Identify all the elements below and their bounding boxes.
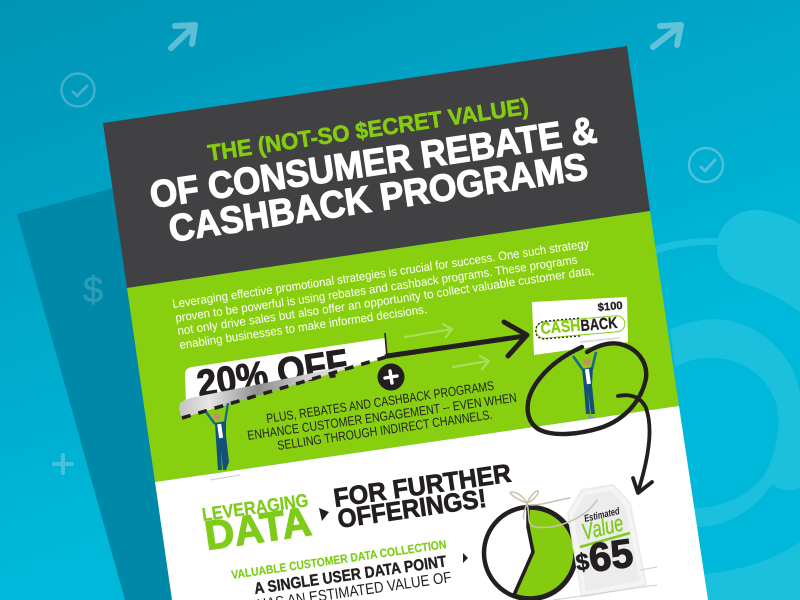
coupon: 20% off: 20% OFF: [194, 342, 351, 406]
icon: check left: [62, 74, 94, 106]
tag: amount: 65: [586, 531, 636, 581]
subhead: VALUABLE CUSTOMER DATA COLLECTION: [230, 537, 447, 582]
light arrows: [405, 324, 489, 369]
card pill: [535, 315, 626, 339]
heading: leveraging: LEVERAGING: [201, 489, 310, 525]
stat line one: A SINGLE USER DATA POINT: [253, 553, 448, 598]
intro paragraph: proven to be powerful is using rebates and cashback programs. These programs: [174, 253, 578, 325]
caption: [246, 378, 518, 453]
caption: PLUS, REBATES AND CASHBACK PROGRAMS: [265, 378, 495, 426]
tag string: [510, 491, 597, 528]
tag underline: [580, 533, 630, 547]
ground line: [553, 567, 657, 600]
caption: SELLING THROUGH INDIRECT CHANNELS.: [276, 407, 493, 453]
coupon: 20% off: [179, 338, 387, 418]
icon: arrow right: [653, 25, 681, 47]
card small print: [580, 338, 620, 342]
panel: white data section: [155, 406, 708, 600]
icon: arrow left: [171, 25, 195, 48]
intro paragraph: not only drive sales but also offer an opportunity to collect valuable customer data,: [176, 263, 595, 338]
icon: plus: [54, 455, 72, 473]
triangle marker: [319, 508, 329, 521]
scribble arrow: [618, 395, 652, 493]
panel: header: [103, 46, 650, 288]
tag: value: Value: [579, 509, 626, 545]
heading: for further: FOR FURTHER: [332, 458, 513, 513]
back sheet: [17, 162, 320, 600]
decorative swirl shapes: [655, 210, 800, 600]
cashback card: [532, 297, 628, 355]
caption: ENHANCE CUSTOMER ENGAGEMENT -- EVEN WHEN: [246, 390, 518, 443]
icon: dollar: $: [83, 269, 103, 310]
triangle marker two: [463, 553, 468, 563]
tick mark: [385, 333, 387, 357]
person right: [573, 352, 596, 419]
icon: plus circle: [378, 364, 404, 390]
tag: dollar sign: $: [574, 548, 592, 577]
big arrow: [387, 322, 527, 356]
intro paragraph: [171, 236, 595, 352]
card amount: $100: [597, 300, 623, 314]
tag: estimated: Estimated: [583, 506, 621, 525]
person left: [206, 403, 232, 478]
card label black: BACK: [580, 315, 619, 335]
pie chart: [484, 507, 576, 599]
scribble circle: [528, 343, 646, 434]
intro paragraph: enabling businesses to make informed decisions.: [178, 302, 428, 352]
title line two: CASHBACK PROGRAMS: [166, 146, 591, 251]
heading: offerings: OFFERINGS!: [336, 483, 488, 534]
ground shadow left: [210, 475, 240, 480]
panel: green intro: [127, 211, 679, 482]
title kicker: THE (NOT-SO $ECRET VALUE): [206, 93, 530, 166]
price tag: [568, 485, 646, 597]
title line one: OF CONSUMER REBATE &: [147, 109, 599, 217]
heading: data: DATA: [202, 498, 314, 559]
icon: check right: [689, 148, 723, 182]
intro paragraph: Leveraging effective promotional strategies is crucial for success. One such strategy: [171, 236, 590, 311]
card label green: CASH: [540, 318, 581, 338]
